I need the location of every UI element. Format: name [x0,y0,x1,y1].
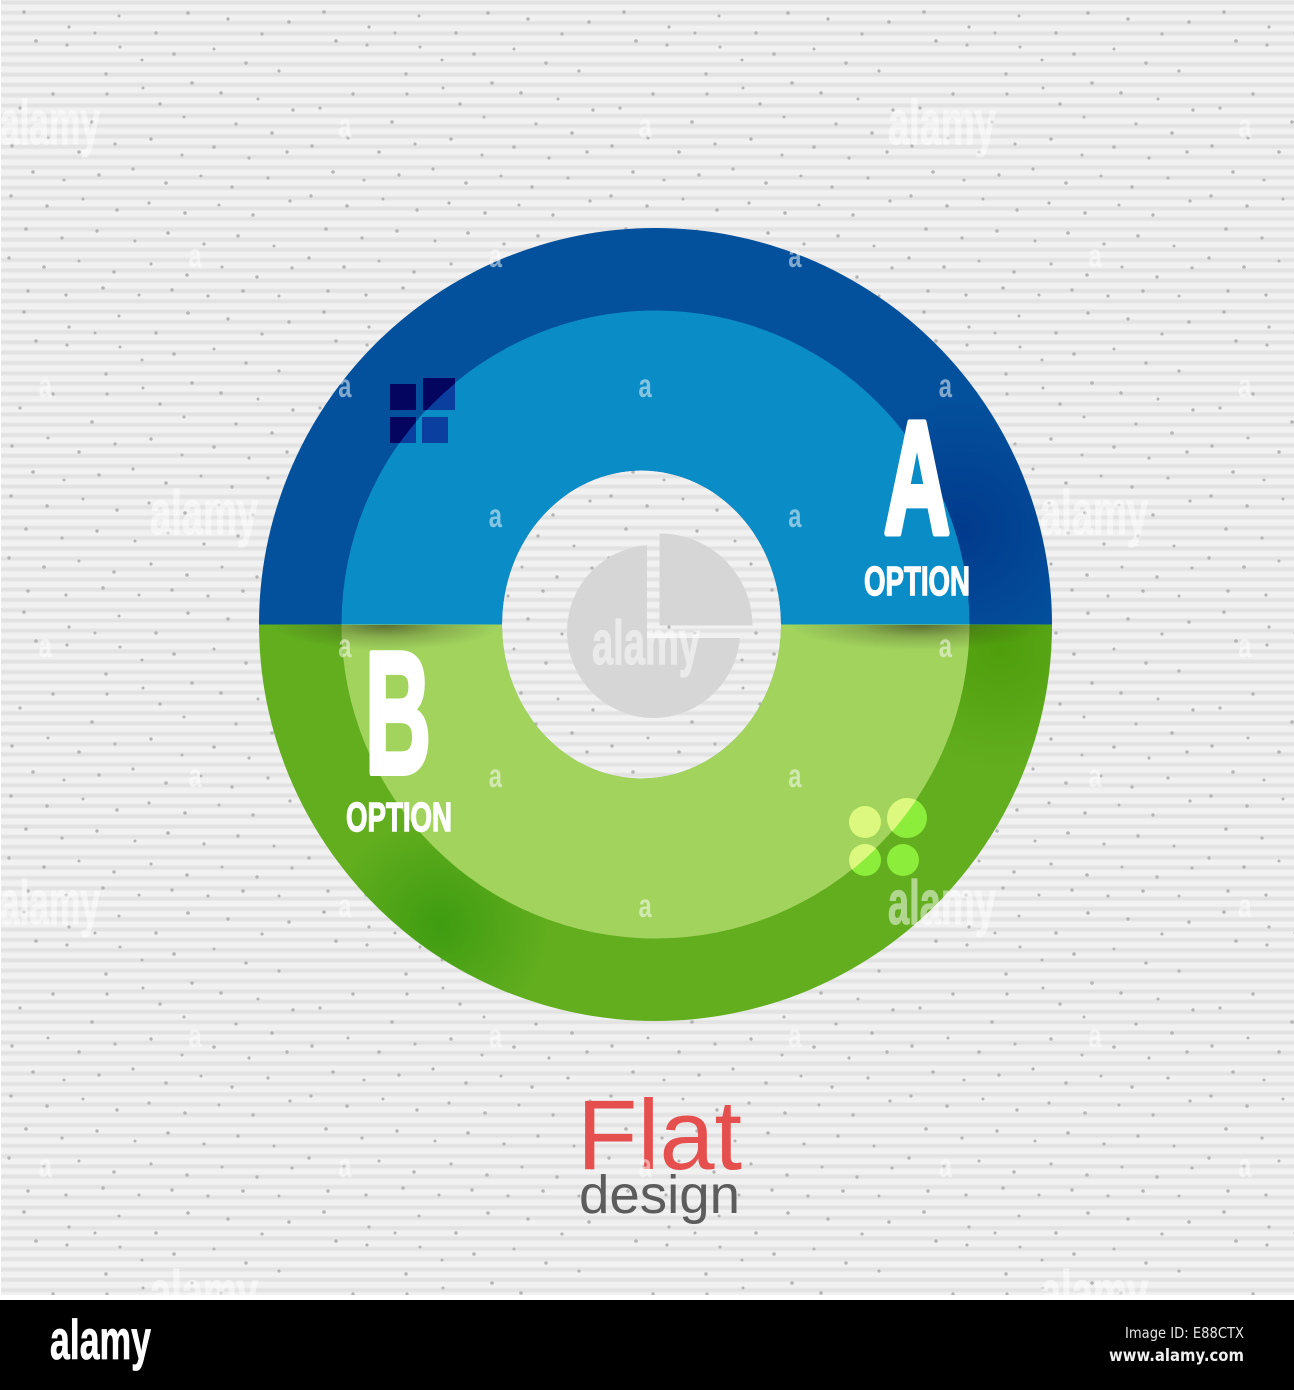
subtitle: design: design [579,1165,740,1225]
watermarks: small a grid: a [1238,108,1252,145]
watermarks: small a grid: a [189,1018,203,1055]
watermarks: small a grid: a [338,628,352,665]
watermarks: small a grid: a [639,108,653,145]
watermarks: small a grid: a [1238,1148,1252,1185]
title: Flat: Flat [577,1079,742,1190]
watermarks: alamy: alamy [1040,479,1148,548]
icon: four dots [849,798,927,876]
watermarks: small a grid: a [39,1148,53,1185]
seam shadow right [805,625,1030,647]
watermarks: small a grid: a [1238,628,1252,665]
text: OPTION: OPTION [864,558,970,604]
watermarks: alamy: alamy [888,869,996,938]
watermarks: small a grid: a [489,758,503,795]
watermarks: small a grid: a [489,238,503,275]
text: OPTION: OPTION [346,794,452,840]
watermarks: alamy: alamy [0,869,100,938]
watermarks: small a grid: a [788,758,802,795]
watermarks: small a grid: a [189,238,203,275]
watermarks: alamy: alamy [592,609,700,678]
seam shadow left [287,625,486,647]
watermarks: small a grid: a [788,498,802,535]
letter B: B [365,615,431,810]
watermarks: alamy: alamy [888,89,996,158]
watermarks: small a grid: a [788,1018,802,1055]
watermarks: small a grid: a [338,108,352,145]
watermarks: small a grid: a [939,628,953,665]
watermarks: alamy [0,89,1148,1328]
footer: image ID: Image ID: E88CTX [1125,1324,1244,1342]
watermarks: small a grid [39,108,1252,1185]
footer: website: www.alamy.com [1109,1346,1244,1366]
watermarks: small a grid: a [39,368,53,405]
segment: option B outer band [259,624,1052,1021]
watermarks: small a grid: a [639,888,653,925]
footer logo: alamy: alamy [50,1308,151,1371]
pie chart icon in centre [567,533,752,718]
watermarks: small a grid: a [338,1148,352,1185]
watermarks: small a grid: a [939,1148,953,1185]
watermarks: alamy: alamy [0,89,100,158]
watermarks: alamy: alamy [150,1259,258,1328]
watermarks: small a grid: a [939,368,953,405]
watermarks: small a grid: a [1089,758,1103,795]
watermarks: small a grid: a [639,368,653,405]
watermarks: small a grid: a [338,888,352,925]
segment: option A inner band [342,311,970,624]
watermarks: small a grid: a [39,628,53,665]
darker green glow beside seam [959,625,1052,754]
watermarks: small a grid: a [189,758,203,795]
watermarks: alamy: alamy [1040,1259,1148,1328]
watermarks: small a grid: a [489,498,503,535]
letter A: A [884,388,950,567]
watermarks: small a grid: a [1089,238,1103,275]
footer bar [0,1300,1294,1390]
segment: option B inner band [342,624,970,938]
icon: four squares [390,378,455,443]
watermarks: small a grid: a [1238,368,1252,405]
darker green glow on outer band [348,842,524,996]
watermarks: small a grid: a [489,1018,503,1055]
watermarks: small a grid: a [788,238,802,275]
watermarks: alamy: alamy [150,479,258,548]
segment: option A outer band [259,228,1052,624]
darker blue glow on outer band [904,433,1050,616]
label: option B [346,615,452,840]
label: option A [864,388,970,604]
watermarks: small a grid: a [639,1148,653,1185]
watermarks: small a grid: a [1238,888,1252,925]
donut chart [259,228,1060,1025]
watermarks: small a grid: a [1089,1018,1103,1055]
watermarks: small a grid: a [338,368,352,405]
